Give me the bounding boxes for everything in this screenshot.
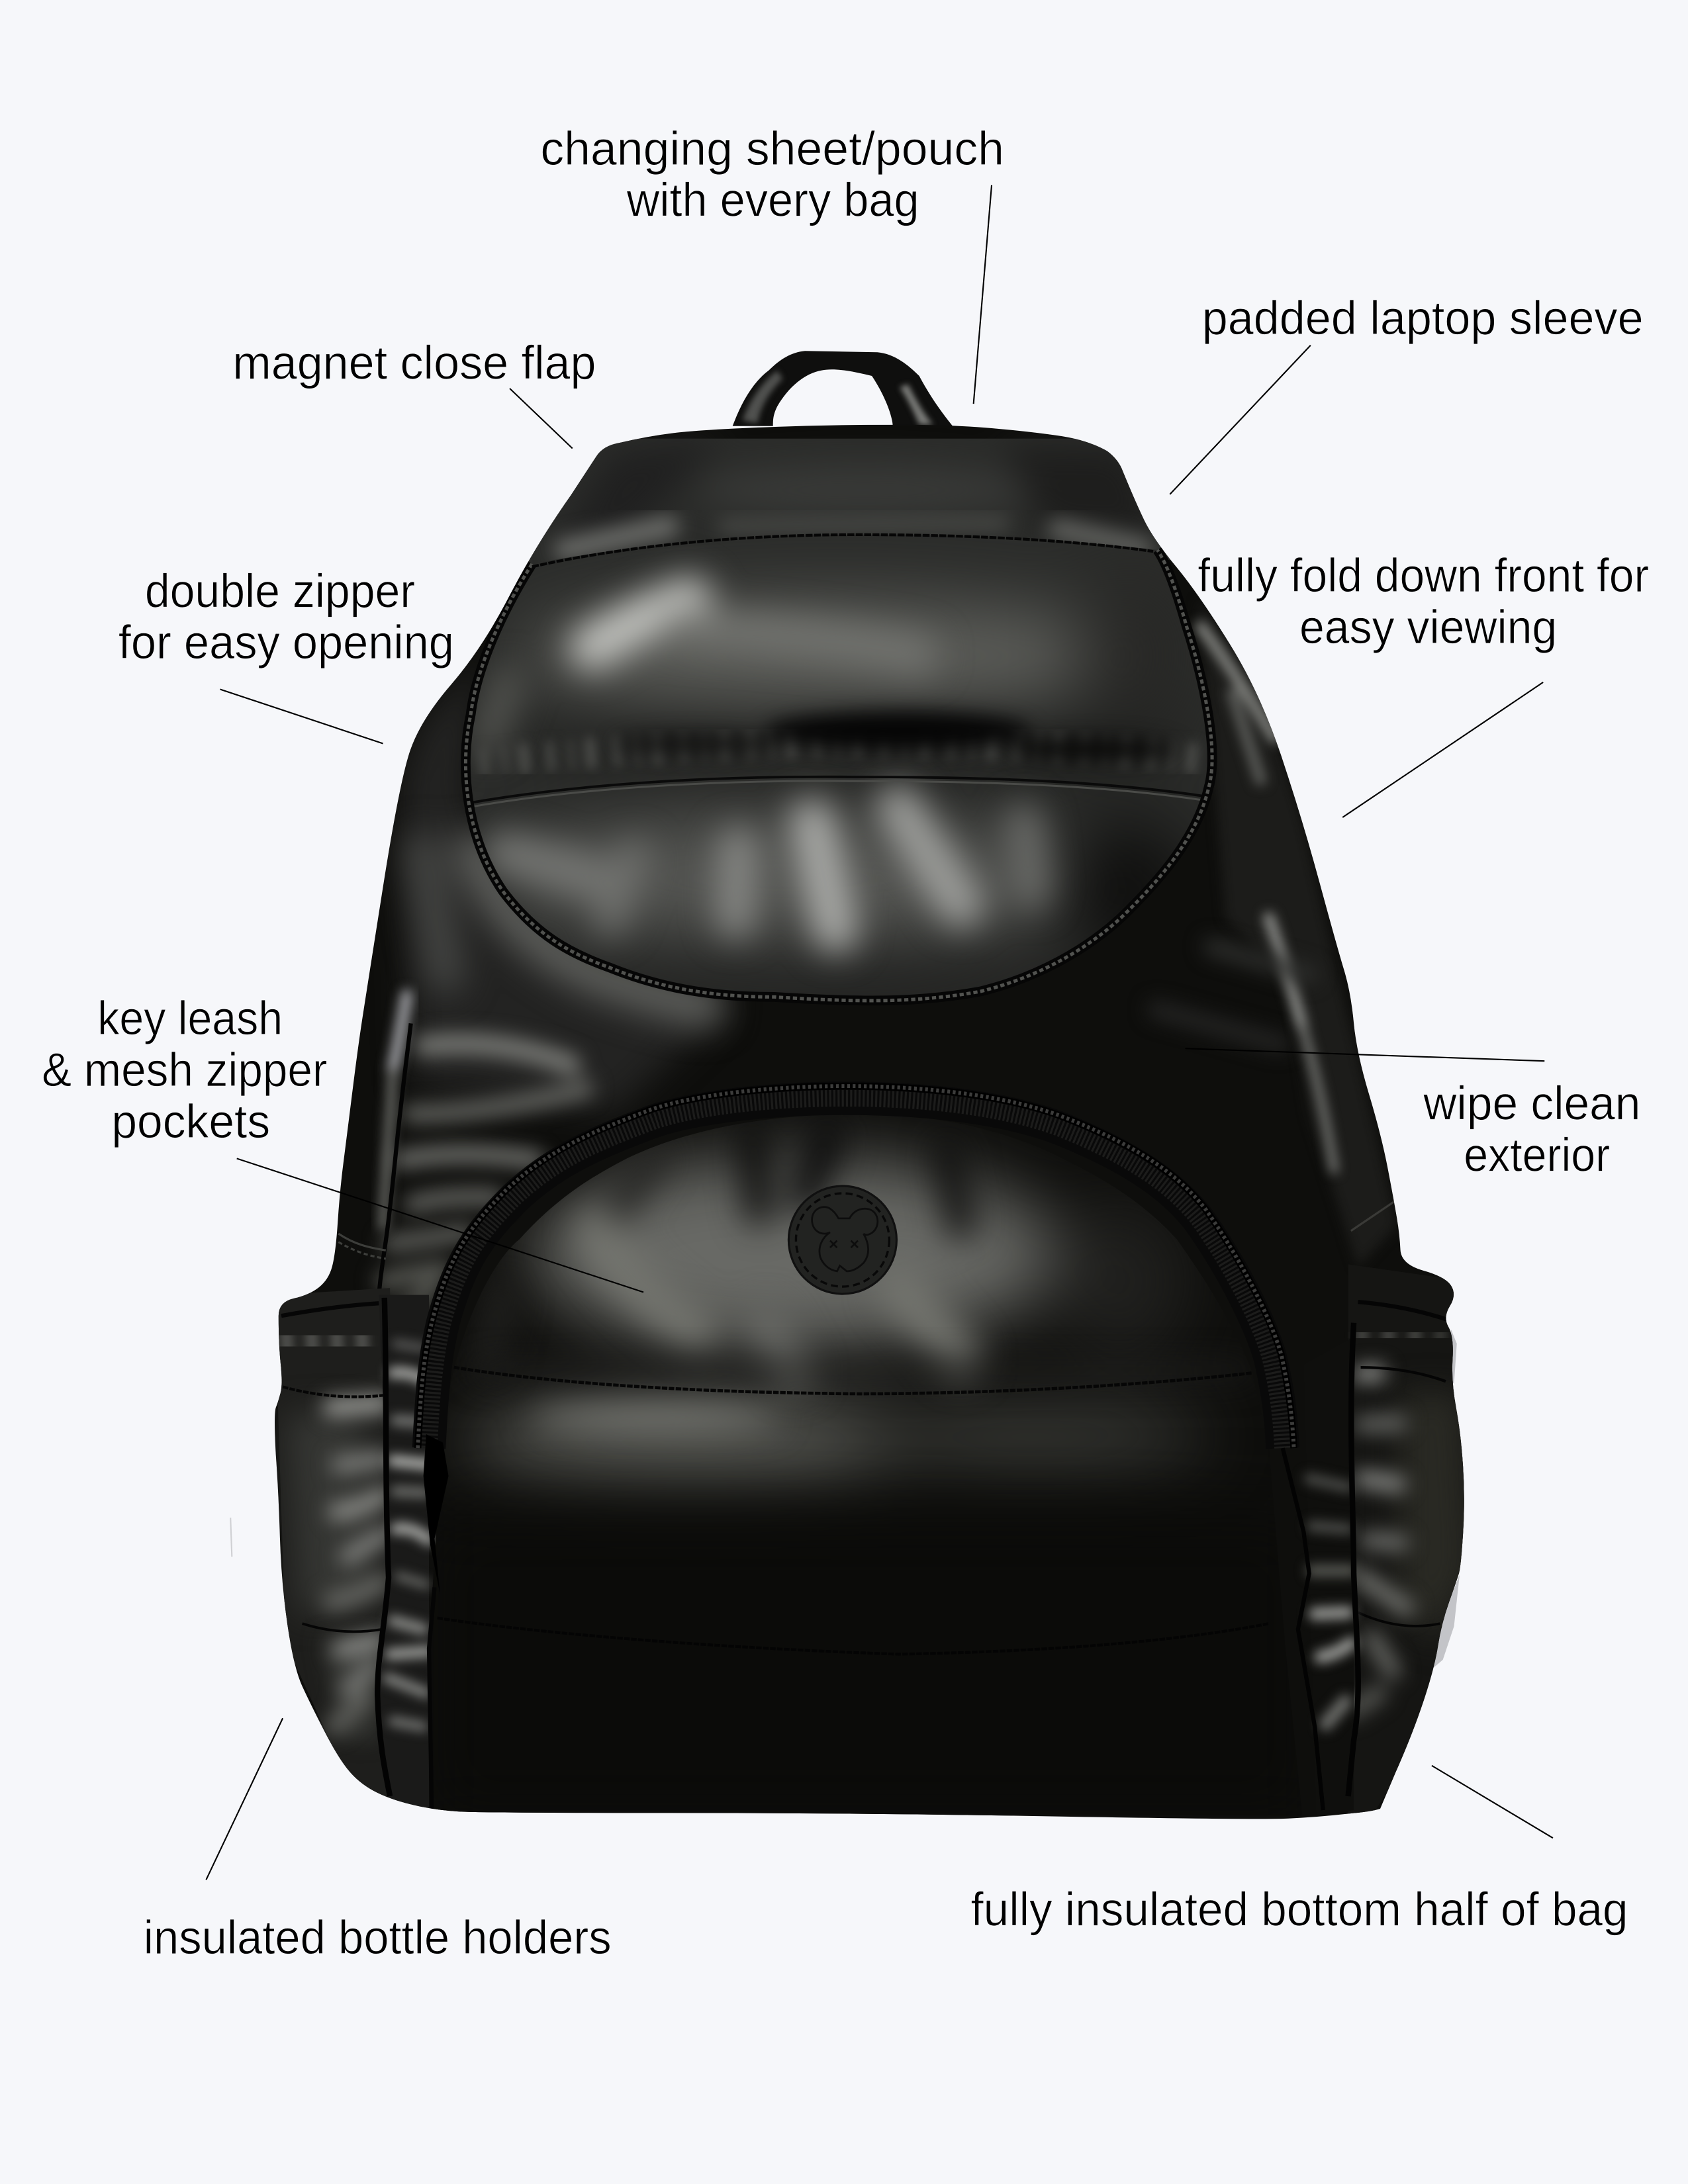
- leader line: wipe clean exterior: [1185, 1048, 1544, 1061]
- bag body: [265, 418, 1476, 1831]
- label: fully fold down front: fully fold down front for: [1197, 549, 1649, 602]
- leader line: magnet close flap: [510, 388, 573, 448]
- zipper: [418, 1086, 1294, 1448]
- top panel shading: [515, 439, 1170, 578]
- label: fully insulated bottom half: fully insulated bottom half of bag: [970, 1884, 1628, 1936]
- right body sheen: [1156, 599, 1397, 1267]
- flap seam: [465, 535, 1212, 1001]
- corrugated strip right: [1303, 1323, 1358, 1816]
- label: double zipper: [118, 565, 454, 669]
- leader line: fully insulated bottom: [1432, 1766, 1553, 1838]
- side pocket right: [1348, 1264, 1471, 1816]
- label: double zipper: double zipper: [145, 565, 415, 617]
- infographic canvas: [44, 130, 1648, 1954]
- label: changing sheet/pouch: with every bag: [626, 174, 919, 227]
- label: wipe clean exterior: wipe clean: [1423, 1077, 1640, 1130]
- handle: [733, 351, 953, 426]
- label: key leash and mesh zipper pockets: pockets: [111, 1095, 270, 1148]
- backpack illustration: [265, 351, 1476, 1831]
- label: changing sheet/pouch: [540, 122, 1004, 227]
- label: fully fold down front: easy viewing: [1299, 601, 1557, 654]
- leader line: changing sheet: [974, 185, 992, 404]
- label: magnet close flap: magnet close flap: [232, 336, 596, 389]
- label: wipe clean exterior: [1423, 1077, 1640, 1181]
- flap: [459, 529, 1219, 1009]
- label: key leash and mesh zipper pockets: & mesh zipper: [42, 1044, 327, 1097]
- label: key leash and mesh zipper pockets: [42, 992, 327, 1148]
- leader line: insulated bottle holders: [206, 1718, 283, 1880]
- label: fully fold down front: [1197, 549, 1649, 654]
- flap wrinkle band: [481, 741, 1197, 763]
- corrugated strip left: [377, 1295, 434, 1810]
- pocket folds: [487, 1135, 961, 1371]
- side pocket left: [274, 1288, 390, 1810]
- badge with mouse logo: [788, 1185, 898, 1295]
- label: wipe clean exterior: exterior: [1464, 1128, 1610, 1181]
- flap highlights: [487, 599, 1031, 930]
- label: padded laptop sleeve: padded laptop sleeve: [1202, 292, 1644, 345]
- left outer strip highlight: [383, 995, 406, 1225]
- zipper pull and lower side seams: [424, 1434, 448, 1594]
- label: double zipper: for easy opening: [118, 616, 454, 669]
- pocket seams: [454, 1367, 1252, 1394]
- leader line: fully fold down front: [1342, 682, 1543, 817]
- left body sheen: [338, 655, 724, 1316]
- front pocket: [418, 1086, 1323, 1831]
- label: changing sheet/pouch: changing sheet/pouch: [540, 122, 1004, 175]
- leader line: key leash pockets: [237, 1158, 643, 1292]
- cut-out halo remnants: [230, 1330, 1460, 1668]
- leader line: padded laptop sleeve: [1170, 345, 1311, 494]
- label: insulated bottle holders: insulated bottle holders: [144, 1911, 612, 1964]
- label: key leash and mesh zipper pockets: key leash: [97, 992, 283, 1045]
- leader line: double zipper: [220, 689, 383, 743]
